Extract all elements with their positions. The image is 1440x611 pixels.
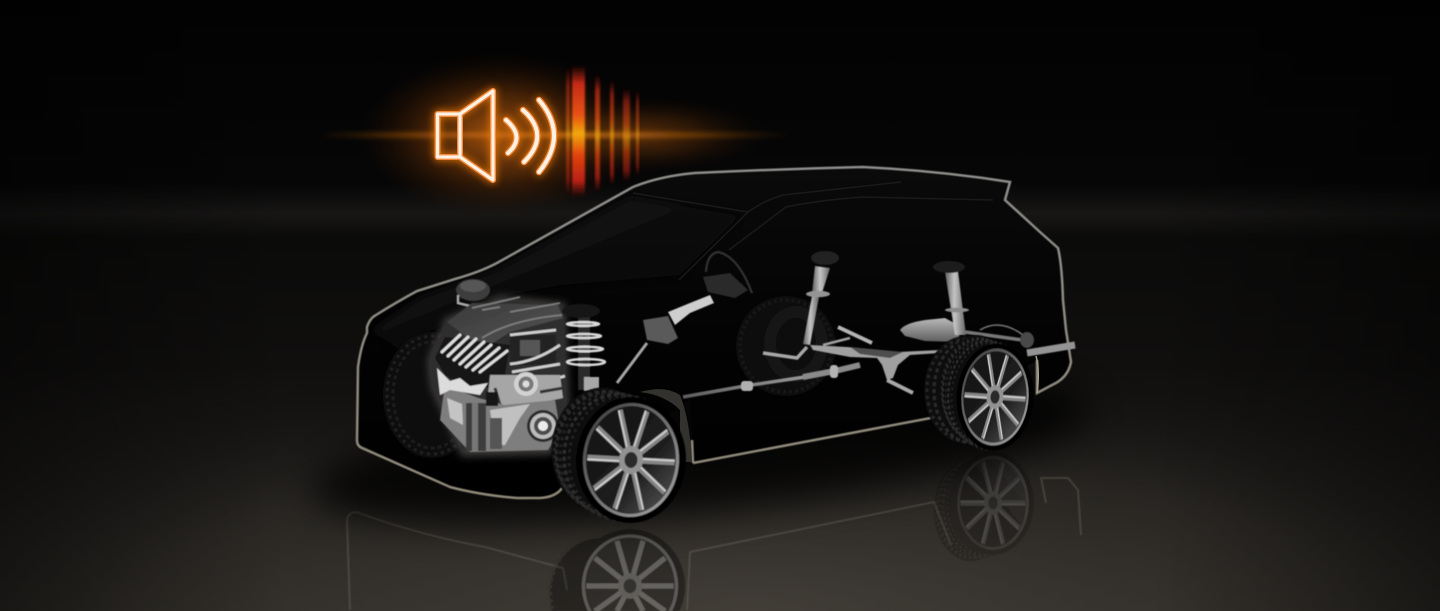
icon: speaker with sound waves <box>438 91 554 180</box>
brake line <box>980 325 1023 335</box>
pulley lower <box>527 410 559 442</box>
upper engine detail <box>488 330 565 410</box>
front spring and strut <box>562 304 605 391</box>
intake ribs <box>435 337 510 390</box>
reflected front wheel <box>550 529 685 611</box>
lower block <box>440 385 560 452</box>
engine halo <box>430 298 567 454</box>
background: dark studio with floor <box>0 187 1440 611</box>
hood shading <box>382 202 672 330</box>
far-side wheel, rear <box>736 296 836 396</box>
coils <box>567 322 605 365</box>
sound bars <box>566 65 639 197</box>
pulley upper <box>514 372 538 396</box>
strut shaft <box>578 315 590 390</box>
left strut <box>803 251 839 345</box>
rear wheel <box>935 333 1038 453</box>
sound wave flare <box>332 63 774 206</box>
steering wheel and column <box>617 252 752 383</box>
engine <box>430 279 567 454</box>
cylinder <box>447 392 502 451</box>
drive shaft <box>683 365 860 397</box>
car body silhouette <box>357 167 1071 498</box>
intake teeth <box>437 368 488 395</box>
front wheel arch <box>640 389 692 462</box>
rear wheel arch <box>1036 356 1038 393</box>
engine cover <box>447 303 563 346</box>
rear suspension <box>763 251 1075 393</box>
muffler <box>900 318 960 342</box>
reflection of the car on the floor <box>347 451 1081 611</box>
axle beam <box>810 345 940 380</box>
rear wheel back tread <box>924 336 1010 444</box>
door and window lines <box>633 182 993 280</box>
engine block <box>430 299 566 451</box>
reflected body outline <box>347 478 1081 610</box>
car outline <box>357 167 1071 498</box>
floor shadow under car <box>310 386 1079 542</box>
rear stabilizer rod <box>1027 345 1075 353</box>
strut cap <box>562 304 600 318</box>
far-side wheel, front <box>383 332 457 458</box>
front wheel <box>548 385 690 526</box>
reflected rear wheel <box>934 451 1034 561</box>
reservoir cap <box>456 279 490 306</box>
right strut <box>933 261 969 335</box>
